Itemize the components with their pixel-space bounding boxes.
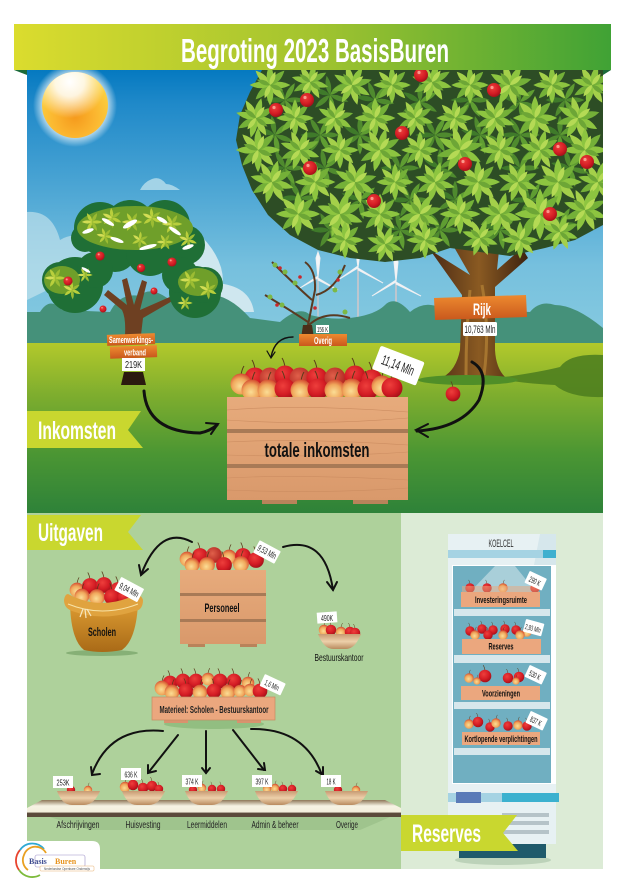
bowl: afschrijvingen: 253K xyxy=(56,778,70,788)
tag: totale inkomsten value: 11,14 Mln xyxy=(379,351,417,379)
logo: Nederlandse Openbare Onderwijs xyxy=(44,867,90,871)
shelf xyxy=(27,800,401,830)
main crate apples xyxy=(230,358,402,400)
signs: samenwerkingsverband xyxy=(107,333,157,371)
bowl: leermiddelen: 374 K xyxy=(186,778,199,786)
arrow: overig to crate xyxy=(267,337,293,358)
crate: kortlopende verplichtingen: Kortlopende verplichtingen xyxy=(464,734,538,745)
shelf labels xyxy=(56,819,358,831)
main crate xyxy=(227,397,408,504)
logo: Buren xyxy=(55,857,77,866)
ribbon: uitgaven: Uitgaven xyxy=(38,519,103,547)
canopy base xyxy=(236,70,603,262)
ribbon: reserves xyxy=(401,815,518,851)
hills xyxy=(27,291,603,343)
shelf labels: Admin & beheer xyxy=(252,819,299,831)
bowl: huisvesting xyxy=(120,768,165,805)
scholen basket xyxy=(64,572,143,656)
bowls on shelf xyxy=(53,768,368,805)
sign: rijk: Rijk xyxy=(473,300,491,319)
crate: reserves xyxy=(462,619,544,654)
sign: rijk xyxy=(434,295,527,336)
panel: landscape scene xyxy=(27,55,623,513)
tag: scholen value: 9,04 Mln xyxy=(117,581,141,599)
sign: overig: Overig xyxy=(314,336,332,347)
main crate: totale inkomsten xyxy=(264,440,370,462)
crate: kortlopende verplichtingen xyxy=(462,711,548,745)
small apple tree xyxy=(42,200,223,385)
crate: voorzieningen xyxy=(461,665,547,700)
signs: samenwerkingsverband: Samenwerkings- xyxy=(109,335,153,345)
arrow: personeel to scholen xyxy=(139,538,192,575)
materieel crate xyxy=(152,668,275,729)
canopy dark leaves xyxy=(250,71,594,254)
canopy light leaves xyxy=(236,70,603,262)
logo: Basis xyxy=(29,857,47,866)
bestuurskantoor bowl: Bestuurskantoor xyxy=(314,652,364,664)
overig small tree xyxy=(264,261,350,334)
arrow: samenwerkingsverband to crate xyxy=(144,391,218,434)
crate: voorzieningen: 530 K xyxy=(527,669,542,682)
bowl: overige xyxy=(321,775,368,805)
bestuurskantoor bowl xyxy=(314,611,364,664)
crate: investeringsruimte xyxy=(461,571,547,607)
panel: fridge: KOELCEL xyxy=(488,538,514,550)
wind turbines xyxy=(300,250,422,317)
big apple tree xyxy=(236,70,603,385)
crate: reserves: Reserves xyxy=(488,642,514,652)
tag: personeel value xyxy=(253,540,281,564)
tag: materieel value xyxy=(259,674,286,696)
materieel crate: Materieel: Scholen - Bestuurskantoor xyxy=(160,704,268,716)
bowl: huisvesting: 636 K xyxy=(124,770,138,780)
title banner: Begroting 2023 BasisBuren xyxy=(181,32,449,69)
crate: investeringsruimte: Investeringsruimte xyxy=(475,595,527,606)
bestuurskantoor bowl: 490K xyxy=(321,614,333,623)
crate: investeringsruimte: 290 K xyxy=(527,575,542,588)
ribbon: inkomsten: Inkomsten xyxy=(38,417,116,445)
tree shadow xyxy=(505,355,603,397)
sign: overig: 156 K xyxy=(317,327,328,334)
tag: materieel value: 1,6 Mln xyxy=(263,678,280,693)
panel: fridge xyxy=(448,534,559,865)
personeel crate: Personeel xyxy=(204,601,240,615)
ribbon: inkomsten xyxy=(27,411,143,448)
icon: sun xyxy=(34,70,116,146)
bowl: admin en beheer xyxy=(252,775,298,805)
shelf labels: Afschrijvingen xyxy=(56,819,100,831)
title banner xyxy=(14,24,611,75)
bowl: leermiddelen xyxy=(182,775,228,805)
crate: reserves: 2,93 Mln xyxy=(524,622,542,635)
sign: overig xyxy=(299,325,347,347)
fallen apple xyxy=(446,381,460,401)
clouds xyxy=(27,178,254,312)
personeel crate xyxy=(180,542,266,647)
sign: rijk: 10,763 Mln xyxy=(464,324,496,336)
bowl: admin en beheer: 397 K xyxy=(256,778,269,786)
tag: personeel value: 9,53 Mln xyxy=(256,543,278,561)
shelf labels: Overige xyxy=(336,819,358,831)
crate: kortlopende verplichtingen: 837 K xyxy=(528,715,543,728)
small tree foliage xyxy=(42,200,223,318)
shelf labels: Leermiddelen xyxy=(187,819,227,831)
signs: samenwerkingsverband: 219K xyxy=(125,360,142,371)
arrows: materieel to bowls xyxy=(91,729,323,775)
bowl: afschrijvingen xyxy=(53,776,100,805)
arrow: personeel to bestuurskantoor xyxy=(283,545,337,590)
ground xyxy=(27,343,603,513)
bowl: overige: 18 K xyxy=(326,778,336,786)
signs: samenwerkingsverband: verband xyxy=(124,348,146,358)
tag: totale inkomsten value xyxy=(372,346,425,386)
arrow: rijk to crate xyxy=(416,362,483,437)
panel: lower section background xyxy=(27,513,603,869)
apples on big tree xyxy=(269,68,594,221)
trunk xyxy=(430,240,528,377)
shelf labels: Huisvesting xyxy=(126,819,161,831)
tag: scholen value xyxy=(114,577,144,602)
crate: voorzieningen: Voorzieningen xyxy=(482,688,520,700)
ribbon: reserves: Reserves xyxy=(412,820,481,848)
scholen basket: Scholen xyxy=(88,625,116,639)
logo xyxy=(16,841,100,877)
